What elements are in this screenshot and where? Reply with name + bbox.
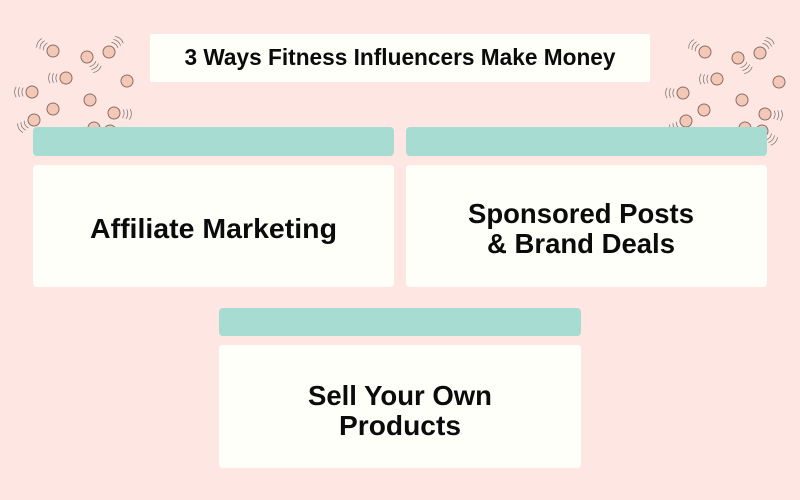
panel label: [308, 380, 492, 441]
panel header bar: [219, 308, 581, 336]
title: [150, 34, 650, 82]
icon: left coin cluster: [15, 36, 133, 137]
panel: affiliate marketing: [33, 127, 394, 287]
panel label: Sell Your Own: [308, 380, 492, 411]
panel header bar: [33, 127, 394, 156]
panel label: & Brand Deals: [487, 228, 675, 259]
panel body: [219, 345, 581, 468]
panel body: [406, 165, 767, 287]
title: 3 Ways Fitness Influencers Make Money: [184, 44, 616, 70]
icon: right coin cluster: [666, 37, 785, 146]
panel header bar: [406, 127, 767, 156]
panel: sell your own products: [219, 308, 581, 468]
panel body: [33, 165, 394, 287]
panel label: Products: [339, 410, 461, 441]
panel: sponsored posts and brand deals: [406, 127, 767, 287]
panel label: [468, 198, 694, 259]
panel label: Sponsored Posts: [468, 198, 694, 229]
panel label: Affiliate Marketing: [90, 213, 337, 244]
